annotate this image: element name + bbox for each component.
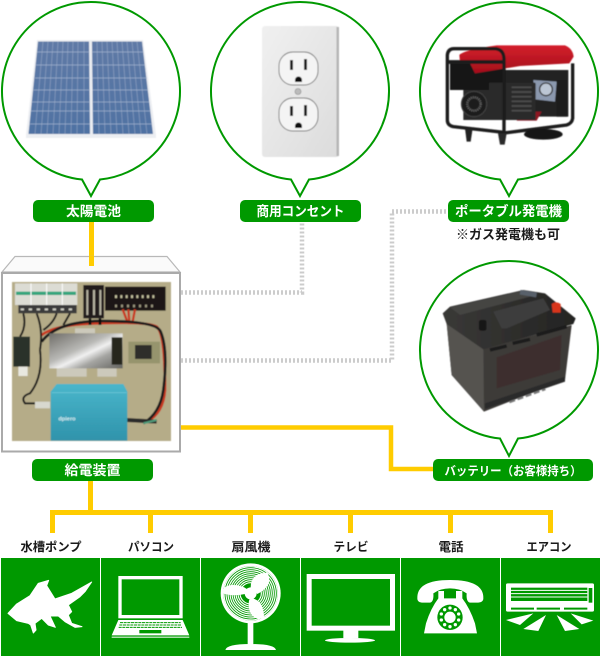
power unit box bbox=[2, 256, 180, 452]
appliance: telephone bbox=[401, 540, 500, 656]
label: generator bbox=[448, 200, 569, 222]
photo: car battery bbox=[443, 290, 576, 412]
label: power unit: 給電装置 bbox=[64, 462, 120, 478]
appliance: computer bbox=[101, 540, 200, 656]
label: solar: 太陽電池 bbox=[66, 204, 122, 219]
photo: power unit interior bbox=[12, 282, 171, 441]
icon: fan bbox=[221, 563, 281, 650]
appliance: fan: 扇風機 bbox=[232, 539, 270, 554]
icon: fish bbox=[8, 580, 92, 633]
photo: power unit interior: dpiero bbox=[58, 417, 76, 423]
icon: telephone bbox=[417, 580, 483, 633]
photo: wall outlet bbox=[262, 26, 339, 157]
label: power unit bbox=[32, 459, 153, 481]
icon: TV bbox=[307, 574, 395, 643]
connector: battery line bbox=[181, 428, 433, 469]
appliance: TV: テレビ bbox=[334, 539, 368, 554]
bubble: battery bbox=[420, 261, 598, 456]
appliance: fan bbox=[201, 539, 300, 656]
photo: generator bbox=[447, 45, 574, 145]
label: generator: ポータブル発電機 bbox=[455, 203, 562, 219]
appliance: air conditioner: エアコン bbox=[526, 540, 572, 554]
appliance: aquarium pump bbox=[1, 539, 100, 656]
label: outlet bbox=[240, 200, 361, 222]
label: solar bbox=[33, 200, 154, 222]
connector: power unit to appliances bbox=[52, 481, 550, 533]
label: battery: バッテリー（お客様持ち） bbox=[444, 463, 582, 478]
icon: laptop bbox=[112, 576, 189, 638]
appliance: air conditioner bbox=[501, 540, 600, 656]
label: outlet: 商用コンセント bbox=[256, 203, 344, 219]
note: gas generator: ※ガス発電機も可 bbox=[456, 227, 560, 242]
appliance: telephone: 電話 bbox=[438, 540, 464, 554]
appliance: aquarium pump: 水槽ポンプ bbox=[20, 539, 82, 554]
connector: outlet dotted line bbox=[181, 222, 302, 292]
connector: solar panel to power unit bbox=[89, 222, 94, 266]
bubble: solar panel bbox=[2, 2, 180, 196]
label: battery bbox=[433, 459, 593, 481]
connector: generator dotted line bbox=[181, 212, 447, 360]
icon: air conditioner bbox=[506, 583, 594, 631]
photo: solar panel bbox=[26, 40, 156, 138]
bubble: generator bbox=[420, 2, 598, 196]
appliance: computer: パソコン bbox=[128, 540, 174, 554]
bubble: outlet bbox=[211, 2, 389, 196]
appliance: TV bbox=[301, 539, 400, 656]
